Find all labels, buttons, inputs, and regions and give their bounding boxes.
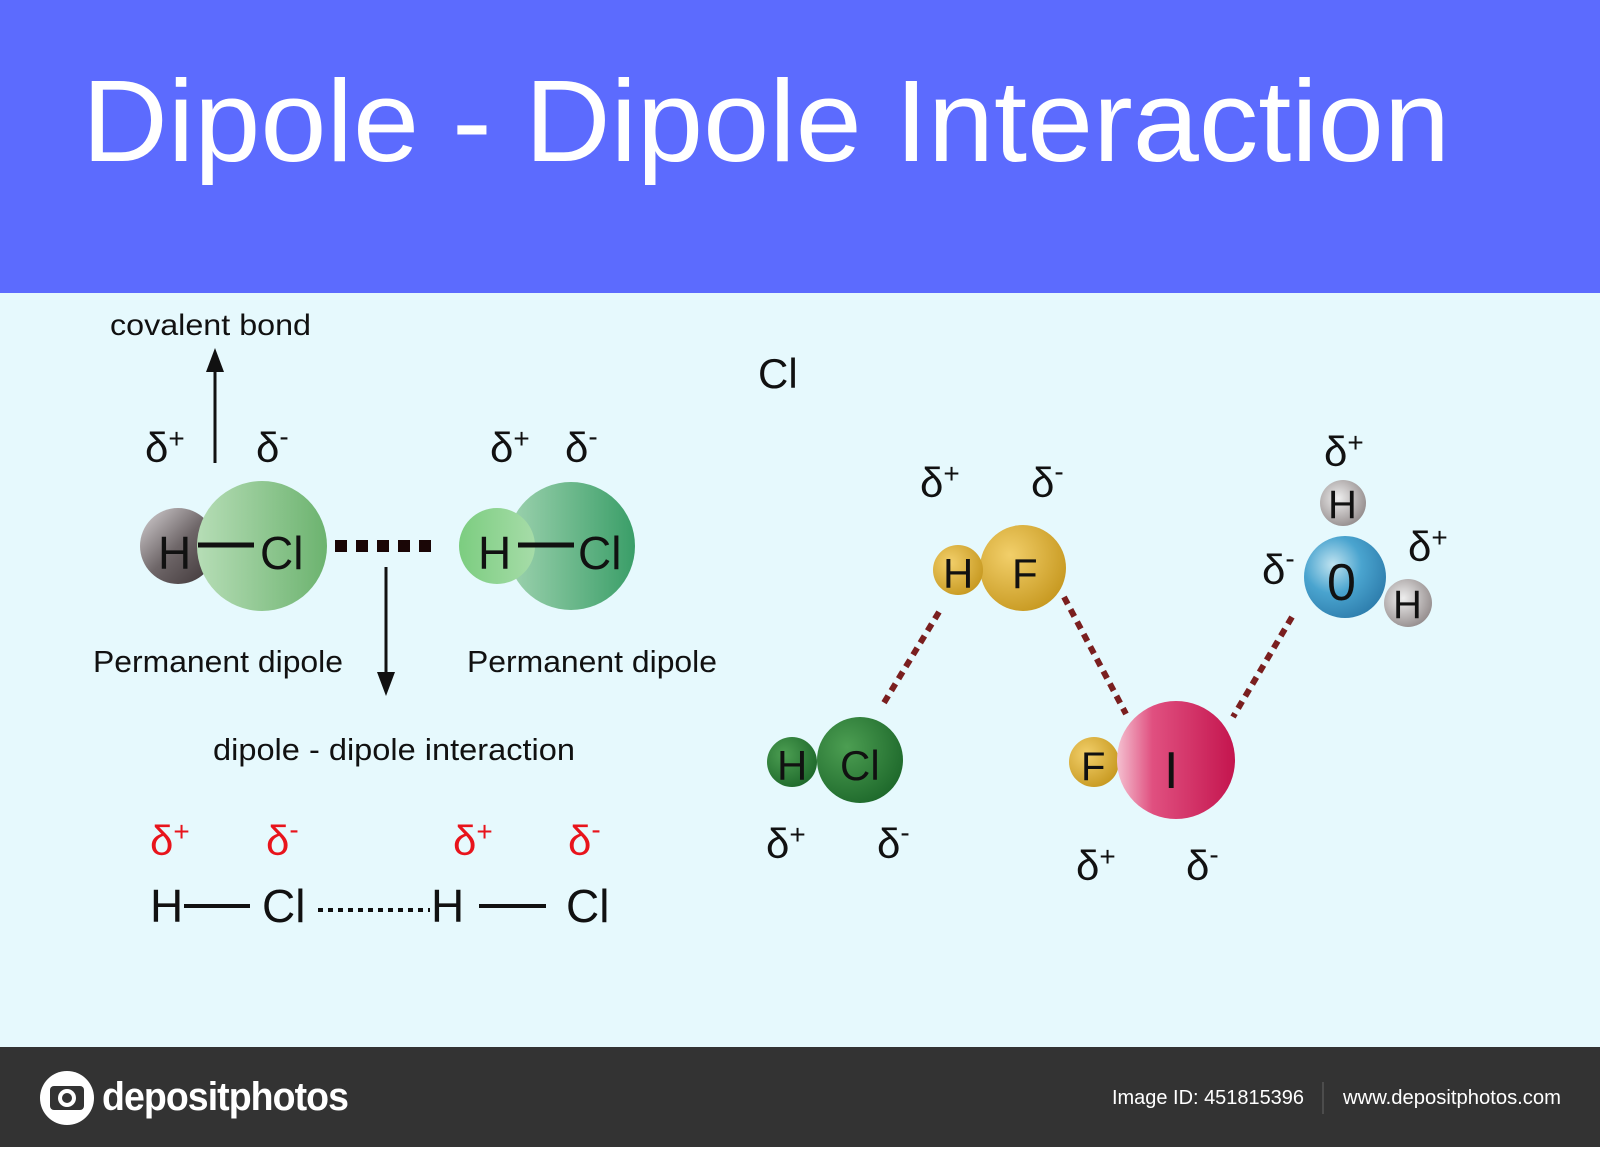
label: permanent dipole right: Permanent dipole bbox=[467, 644, 717, 679]
right HCl molecule bbox=[459, 421, 635, 610]
dotted interaction line bbox=[335, 540, 434, 552]
footer bar bbox=[0, 1047, 1600, 1147]
FI molecule: F bbox=[1081, 745, 1105, 789]
right HCl molecule: δ bbox=[490, 424, 513, 471]
FI molecule: δ bbox=[1186, 842, 1209, 889]
red partial charges: δ bbox=[453, 817, 476, 864]
header banner bbox=[0, 0, 1600, 293]
FI molecule: + bbox=[1099, 841, 1116, 872]
HCl molecule (lower): + bbox=[789, 819, 806, 850]
left HCl molecule: δ bbox=[256, 424, 279, 471]
red partial charges: + bbox=[173, 816, 190, 847]
red partial charges: - bbox=[591, 814, 601, 845]
label: Cl: Cl bbox=[758, 350, 798, 397]
HF molecule bbox=[920, 456, 1066, 611]
HCl molecule (lower): H bbox=[777, 742, 807, 789]
water molecule: H bbox=[1393, 583, 1422, 627]
left HCl molecule: - bbox=[279, 421, 289, 452]
structural formula: H bbox=[431, 880, 464, 932]
red partial charges: - bbox=[289, 814, 299, 845]
water molecule: δ bbox=[1324, 428, 1347, 475]
FI molecule: δ bbox=[1076, 842, 1099, 889]
HF molecule: H bbox=[943, 550, 973, 597]
right HCl molecule: H bbox=[478, 527, 511, 579]
arrow: covalent bond bbox=[214, 360, 216, 463]
left HCl molecule: Cl bbox=[260, 527, 303, 579]
red partial charges bbox=[150, 814, 601, 864]
structural formula: Cl bbox=[566, 880, 609, 932]
HF molecule: δ bbox=[1031, 459, 1054, 506]
title: Dipole - Dipole Interaction bbox=[82, 56, 1450, 186]
HCl molecule (lower) bbox=[766, 717, 910, 867]
HF molecule: + bbox=[943, 458, 960, 489]
red partial charges: δ bbox=[568, 817, 591, 864]
red partial charges: δ bbox=[266, 817, 289, 864]
structural formula bbox=[150, 880, 609, 932]
right HCl molecule: δ bbox=[565, 424, 588, 471]
FI molecule: I bbox=[1164, 742, 1178, 800]
label: permanent dipole left: Permanent dipole bbox=[93, 644, 343, 679]
structural formula: Cl bbox=[262, 880, 305, 932]
left HCl molecule bbox=[140, 421, 327, 611]
water molecule bbox=[1262, 427, 1448, 627]
water molecule: H bbox=[1328, 483, 1357, 527]
left HCl molecule: δ bbox=[145, 424, 168, 471]
right HCl molecule: - bbox=[588, 421, 598, 452]
water molecule: + bbox=[1347, 427, 1364, 458]
FI molecule bbox=[1069, 701, 1235, 889]
red partial charges: δ bbox=[150, 817, 173, 864]
label: dipole - dipole interaction: dipole - dipole interaction bbox=[213, 732, 575, 767]
dashed hydrogen-bond lines bbox=[882, 597, 1292, 717]
left HCl molecule: H bbox=[158, 527, 191, 579]
water molecule: + bbox=[1431, 522, 1448, 553]
right HCl molecule: + bbox=[513, 423, 530, 454]
arrow: dipole-dipole interaction bbox=[384, 567, 388, 684]
logo icon bbox=[40, 1071, 94, 1125]
HCl molecule (lower): - bbox=[900, 817, 910, 848]
HCl molecule (lower): δ bbox=[766, 820, 789, 867]
HF molecule: δ bbox=[920, 459, 943, 506]
image id: Image ID: 451815396 bbox=[1112, 1087, 1304, 1109]
HF molecule: - bbox=[1054, 456, 1064, 487]
right HCl molecule: Cl bbox=[578, 527, 621, 579]
website: www.depositphotos.com bbox=[1342, 1087, 1561, 1109]
HCl molecule (lower): Cl bbox=[840, 742, 880, 789]
label: covalent bond: covalent bond bbox=[110, 309, 311, 342]
water molecule: δ bbox=[1408, 523, 1431, 570]
HF molecule: F bbox=[1012, 550, 1038, 597]
water molecule: 0 bbox=[1327, 554, 1356, 612]
red partial charges: + bbox=[476, 816, 493, 847]
FI molecule: - bbox=[1209, 839, 1219, 870]
water molecule: - bbox=[1285, 543, 1295, 574]
logo wordmark: depositphotos bbox=[102, 1075, 348, 1119]
HCl molecule (lower): δ bbox=[877, 820, 900, 867]
structural formula: H bbox=[150, 880, 183, 932]
left HCl molecule: + bbox=[168, 423, 185, 454]
water molecule: δ bbox=[1262, 546, 1285, 593]
